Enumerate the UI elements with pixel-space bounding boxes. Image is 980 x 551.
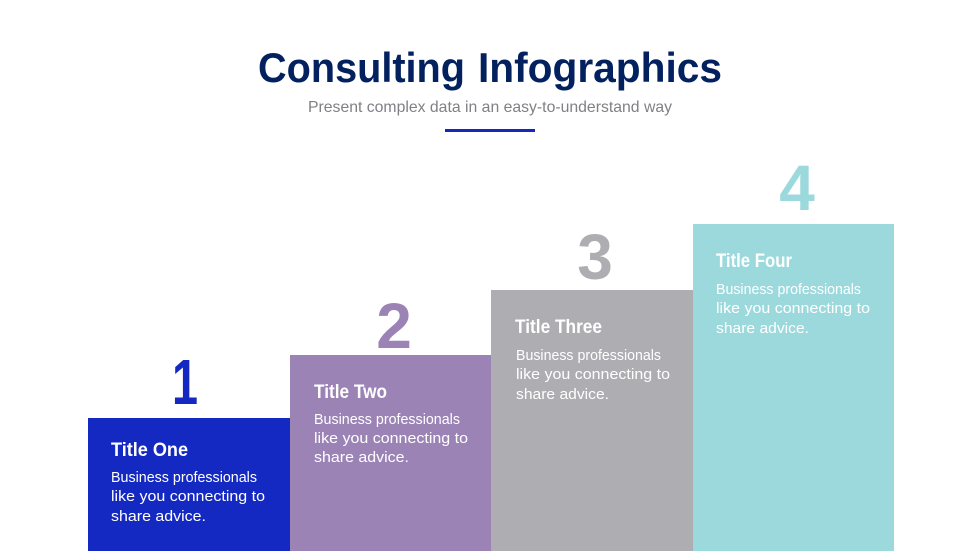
step 3 body: [516, 348, 670, 403]
step 3 body: Business professionals: [516, 348, 661, 364]
step 1 number: 1: [172, 346, 198, 418]
step 3 body: share advice.: [516, 387, 609, 403]
step 4 heading: Title Four: [716, 251, 793, 272]
step 1: [88, 346, 290, 551]
step 2 body: share advice.: [314, 450, 409, 466]
step 1 body: share advice.: [111, 509, 206, 525]
step 2 body: Business professionals: [314, 412, 460, 428]
step 4 panel: [693, 224, 894, 551]
step 1 body: like you connecting to: [111, 489, 265, 505]
step 2 heading: Title Two: [314, 382, 387, 403]
step 4 body: share advice.: [716, 321, 809, 337]
step 4 body: Business professionals: [716, 282, 861, 298]
title underline: [445, 129, 535, 132]
step 3 panel: [491, 290, 693, 551]
step 4: [693, 152, 894, 551]
step 4 body: [716, 282, 870, 337]
title: Infographics: [478, 44, 722, 91]
step 4 body: like you connecting to: [716, 301, 870, 317]
step 2 body: [314, 412, 468, 466]
step 4 number: 4: [779, 152, 815, 224]
step 1 body: [111, 470, 265, 525]
step 3 heading: Title Three: [515, 317, 602, 338]
step 1 heading: Title One: [111, 440, 188, 461]
step 1 panel: [88, 418, 290, 551]
title: [258, 44, 722, 91]
step 2: [290, 290, 491, 551]
step 3 body: like you connecting to: [516, 367, 670, 383]
step 2 body: like you connecting to: [314, 431, 468, 447]
step 3: [491, 221, 693, 551]
step 1 body: Business professionals: [111, 470, 257, 486]
subtitle: Present complex data in an easy-to-understand way: [308, 99, 672, 116]
step 3 number: 3: [577, 221, 613, 293]
title: Consulting: [258, 44, 465, 91]
step 2 panel: [290, 355, 491, 551]
step 2 number: 2: [376, 290, 412, 362]
